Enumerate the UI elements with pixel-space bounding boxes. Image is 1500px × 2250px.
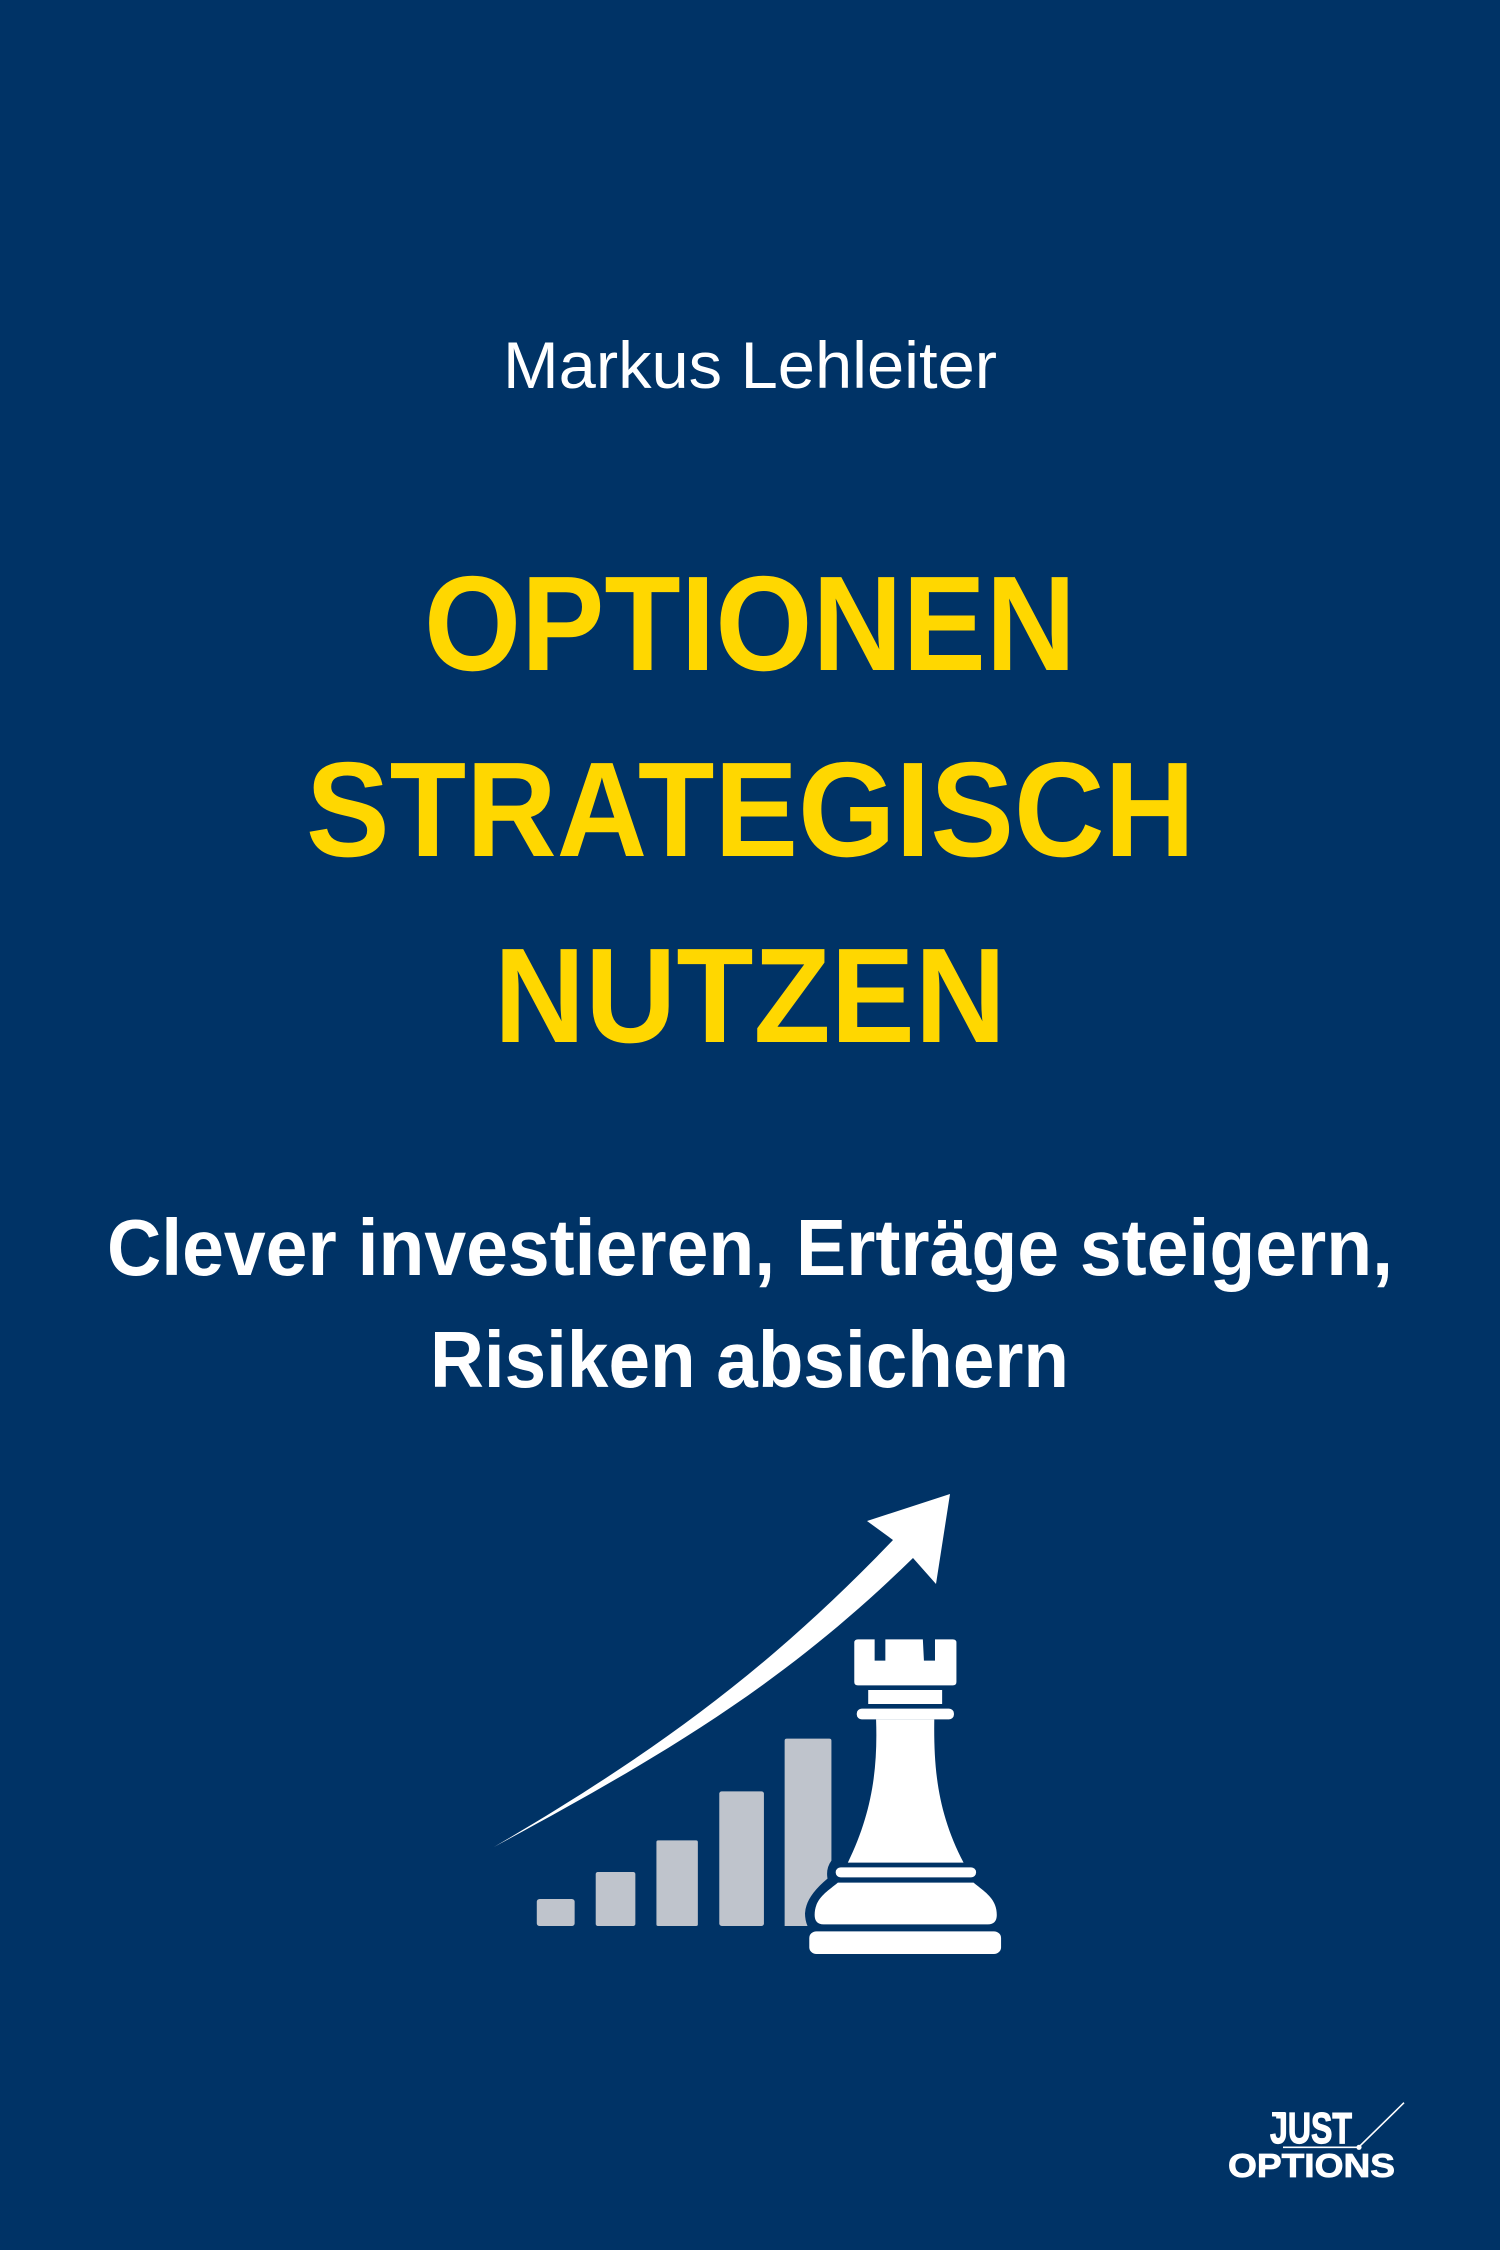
title: OPTIONEN — [424, 548, 1076, 699]
rook — [809, 1639, 1001, 1954]
title: STRATEGISCH — [306, 734, 1195, 885]
subtitle: Risiken absichern — [430, 1315, 1069, 1404]
logo word: just: JUST — [1270, 2104, 1352, 2153]
logo mark: J top bar — [1272, 2112, 1285, 2116]
subtitle — [107, 1203, 1393, 1404]
arrow — [494, 1494, 950, 1847]
logo word: options: OPTIONS — [1228, 2147, 1395, 2184]
icon: chess rook with rising bars and arrow — [494, 1494, 1001, 1954]
logo line with dot — [1283, 2103, 1404, 2150]
title — [306, 548, 1195, 1071]
bar chart — [537, 1739, 831, 1926]
author name: Markus Lehleiter — [503, 328, 997, 402]
title: NUTZEN — [494, 920, 1006, 1071]
subtitle: Clever investieren, Erträge steigern, — [107, 1203, 1393, 1292]
logo: Just Options — [1228, 2103, 1404, 2184]
